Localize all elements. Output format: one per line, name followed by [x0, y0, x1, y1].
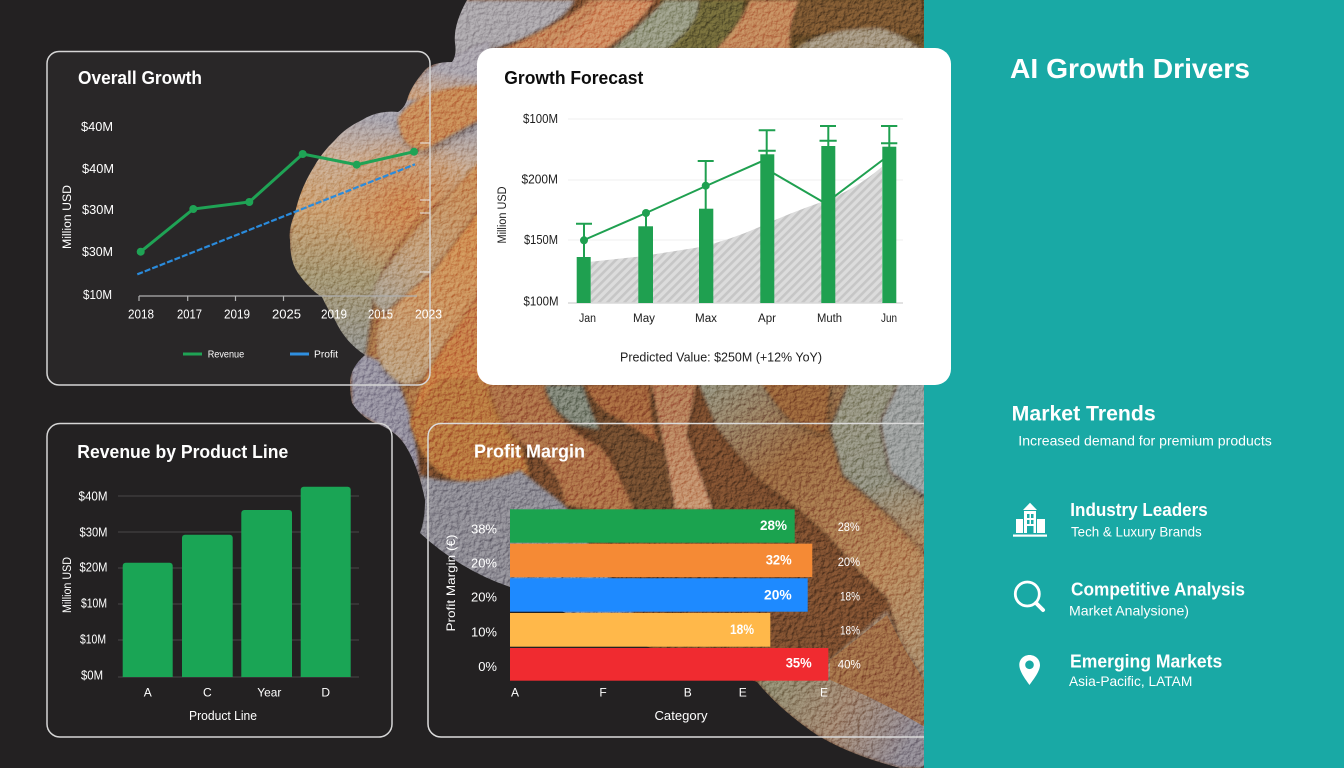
- x-axis labels: Apr: [758, 313, 776, 325]
- y-axis labels: $100M: [524, 294, 558, 308]
- x-axis labels: Jan: [579, 313, 596, 325]
- x-axis labels: 2015: [368, 306, 393, 322]
- x-axis labels: 2017: [177, 306, 202, 322]
- y-axis labels: [78, 490, 108, 682]
- horizontal bars: [510, 509, 828, 681]
- emerging markets text: Asia-Pacific, LATAM: [1069, 673, 1192, 689]
- panel: overall growth: [47, 52, 442, 385]
- industry leaders text: Tech & Luxury Brands: [1071, 524, 1202, 540]
- y-axis labels: 10%: [471, 624, 497, 640]
- forecast line: [580, 159, 884, 244]
- x-axis labels: 2018: [128, 306, 154, 322]
- y-axis labels: $10M: [81, 596, 107, 610]
- category labels: A: [511, 686, 519, 700]
- y-axis labels: 38%: [471, 522, 497, 536]
- right-side lobes: [697, 380, 930, 768]
- y-axis labels: $10M: [83, 287, 112, 302]
- warm base left of card: [361, 202, 477, 425]
- grid lines: [118, 496, 359, 677]
- x-axis labels: 2019: [224, 306, 250, 322]
- legend: Profit: [314, 350, 338, 360]
- bar value labels: 18%: [730, 621, 754, 637]
- profit dashed line: [137, 164, 415, 274]
- bars: [577, 146, 896, 303]
- bar value labels: 32%: [766, 551, 792, 567]
- y-axis labels: 20%: [471, 590, 497, 604]
- revenue line: [137, 148, 418, 256]
- category labels: [511, 686, 828, 700]
- x-axis labels: [144, 686, 330, 700]
- x-axis labels: Year: [257, 686, 281, 700]
- icon: magnifier: [1015, 582, 1043, 610]
- bar value labels: [730, 517, 812, 671]
- y-axis title: Million USD: [62, 557, 74, 613]
- panel frame: [47, 424, 392, 737]
- predicted value note: Predicted Value: $250M (+12% YoY): [620, 350, 822, 364]
- heading: Profit Margin: [474, 442, 585, 462]
- x-axis labels: Jun: [881, 313, 897, 325]
- icon: building: [1013, 503, 1047, 537]
- x axis: [139, 143, 430, 301]
- market trends description: Increased demand for premium products: [1018, 433, 1272, 449]
- panel: revenue by product line: [47, 424, 392, 737]
- category labels: B: [684, 686, 692, 700]
- lilac lower lobe: [350, 354, 420, 480]
- x-axis labels: C: [203, 686, 212, 700]
- x-axis labels: Max: [695, 313, 717, 325]
- bar value labels: 28%: [760, 517, 788, 533]
- y-axis labels: $40M: [82, 161, 114, 176]
- y-axis labels: $10M: [80, 632, 106, 646]
- right value labels: 18%: [840, 590, 860, 604]
- heading: Overall Growth: [78, 68, 202, 88]
- competitive analysis text: [1069, 580, 1245, 618]
- x-axis title: Category: [654, 708, 708, 723]
- y-axis labels: $40M: [81, 119, 113, 134]
- card: [477, 48, 951, 385]
- right value labels: 28%: [838, 520, 860, 534]
- bars: [123, 487, 351, 677]
- grid lines: [568, 119, 903, 240]
- icon: location pin: [1019, 655, 1040, 685]
- category labels: E: [820, 686, 828, 700]
- forecast hatched area: [591, 167, 882, 303]
- panel: sidebar text: [1010, 53, 1272, 689]
- x-axis labels: [128, 306, 442, 322]
- x-axis labels: [579, 313, 897, 325]
- competitive analysis text: Competitive Analysis: [1071, 580, 1245, 600]
- under-card lobes: [408, 378, 716, 613]
- y-axis labels: $0M: [81, 668, 103, 682]
- x-axis labels: May: [633, 313, 655, 325]
- upper lilac lobe: [406, 42, 496, 102]
- y-axis labels: $150M: [524, 233, 558, 247]
- x-axis labels: D: [321, 686, 330, 700]
- market trends heading: Market Trends: [1012, 403, 1156, 426]
- competitive analysis text: Market Analysione): [1069, 602, 1189, 618]
- category labels: F: [599, 686, 607, 700]
- finger lobe three: [376, 212, 477, 392]
- sculpture image: [280, 0, 930, 768]
- legend: Revenue: [208, 350, 245, 360]
- category labels: E: [739, 686, 747, 700]
- y-axis labels: $40M: [78, 490, 108, 504]
- emerging markets text: [1069, 651, 1222, 689]
- y-axis labels: 20%: [471, 556, 497, 570]
- x-axis labels: 2023: [415, 306, 442, 322]
- legend: [183, 350, 338, 360]
- main title: AI Growth Drivers: [1010, 53, 1250, 84]
- x-axis labels: 2025: [272, 306, 301, 322]
- teal sidebar background: [924, 0, 1344, 768]
- y-axis labels: 0%: [478, 659, 497, 674]
- right value labels: [838, 520, 861, 672]
- finger lobe two: [372, 161, 477, 316]
- heading: Growth Forecast: [504, 67, 643, 88]
- right value labels: 40%: [838, 658, 861, 672]
- heading: Revenue by Product Line: [77, 442, 288, 462]
- y-axis labels: [522, 112, 558, 308]
- panel: growth forecast: [477, 48, 951, 385]
- industry leaders text: [1070, 500, 1208, 540]
- dark background: [0, 0, 924, 768]
- finger lobe four: [408, 292, 481, 434]
- bar value labels: 35%: [786, 655, 812, 671]
- y-axis labels: $30M: [82, 202, 114, 217]
- y-axis title: Profit Margin (€): [444, 534, 458, 632]
- y-axis labels: [471, 522, 497, 674]
- y-axis labels: $30M: [80, 526, 108, 540]
- top strip lobes: [440, 0, 924, 64]
- x-axis title: Product Line: [189, 708, 257, 723]
- right value labels: 20%: [838, 555, 860, 569]
- industry leaders text: Industry Leaders: [1070, 500, 1208, 520]
- emerging markets text: Emerging Markets: [1070, 651, 1222, 671]
- y-axis labels: [81, 119, 114, 302]
- error bars: [576, 126, 897, 258]
- y-axis title: Million USD: [62, 185, 74, 249]
- x-axis labels: Muth: [817, 313, 842, 325]
- bar value labels: 20%: [764, 587, 792, 603]
- y-axis labels: $200M: [522, 172, 558, 186]
- x-axis labels: 2019: [321, 306, 347, 322]
- y-axis labels: $100M: [523, 112, 558, 126]
- y-axis title: Million USD: [497, 186, 509, 244]
- panel: profit margin: [428, 424, 924, 737]
- panel frame: [428, 424, 924, 737]
- y-axis labels: $30M: [82, 244, 113, 259]
- y-axis labels: $20M: [80, 560, 108, 574]
- right value labels: 18%: [840, 624, 860, 638]
- x-axis labels: A: [144, 686, 152, 700]
- big lobe: [290, 85, 490, 360]
- surface texture: [280, 0, 930, 768]
- panel frame: [47, 52, 430, 385]
